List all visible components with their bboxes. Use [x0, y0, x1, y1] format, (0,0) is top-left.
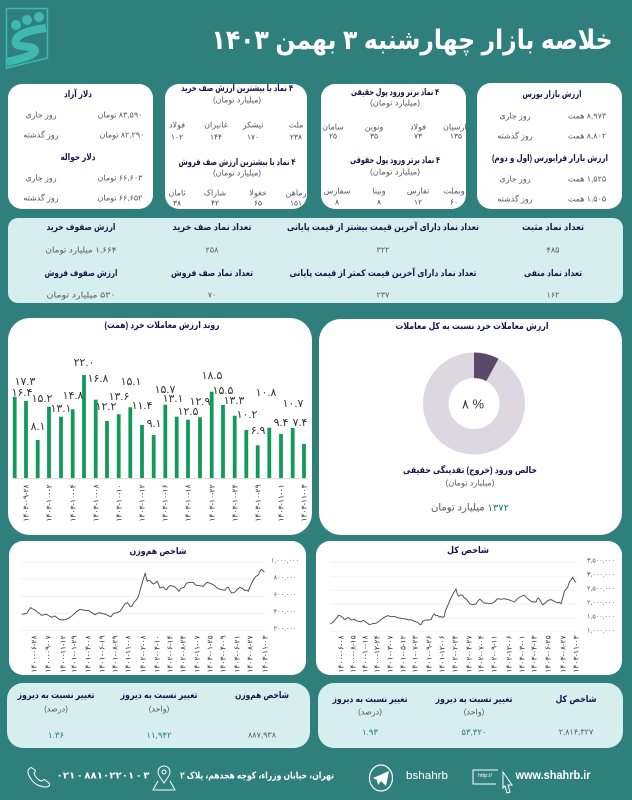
line chart: ۸۰۰,۰۰۰	[274, 574, 296, 582]
line chart: ۱,۰۰۰,۰۰۰	[587, 628, 615, 634]
bar chart: ۲۲.۰	[74, 357, 94, 369]
icon: web link: http://	[478, 773, 492, 779]
bar chart: ۱۴۰۳-۱۱-۰۱	[276, 484, 286, 522]
line chart: ۳,۵۰۰,۰۰۰	[587, 558, 615, 564]
bar chart: ۱۰.۸	[256, 387, 276, 399]
line chart: ۱۴۰۳-۰۱-۲۵	[206, 635, 214, 673]
bar chart: ۱۴۰۳-۱۰-۲۹	[254, 484, 262, 522]
line chart: ۱,۰۰۰,۰۰۰	[271, 558, 299, 564]
panel: market breadth band: ارزش صفوف فروش	[44, 268, 118, 279]
line chart: ۱,۵۰۰,۰۰۰	[587, 614, 615, 620]
panel: market breadth band: ۵۳۰ میلیارد تومان	[47, 290, 116, 300]
panel: market breadth band	[8, 218, 623, 303]
panel: market value: ۱,۵۰۵ همت	[568, 194, 606, 204]
panel: top money inflow: ۱۲	[414, 198, 422, 206]
bar chart: ۱۵.۷	[155, 384, 175, 396]
donut chart: ۸ %	[462, 396, 485, 412]
line chart: ۱۴۰۱-۰۸-۲۹	[110, 635, 120, 673]
chart heading: ارزش معاملات خرد نسبت به کل معاملات	[396, 321, 548, 332]
bar chart: ۱۶.۸	[88, 373, 108, 385]
panel: top money inflow: وبینا	[372, 186, 386, 196]
line chart: ۱۴۰۲-۰۲-۰۸	[138, 635, 148, 673]
panel: dollar rates: ۸۳,۵۹۰ تومان	[98, 110, 142, 120]
panel: market breadth band: تعداد نماد صف خرید	[172, 222, 252, 233]
panel: top money inflow: ۷۳	[414, 132, 422, 140]
bar chart: ۱۴۰۳-۱۰-۱۶	[160, 484, 170, 522]
panel: market breadth band: تعداد نماد صف فروش	[171, 268, 253, 279]
panel: top buy and sell queues: ۶۵	[254, 198, 262, 208]
bar chart: ۱۴۰۳-۱۰-۱۸	[184, 484, 192, 522]
line chart: ۱۴۰۰-۱۲-۲۴	[372, 635, 382, 673]
panel: equal weight index stats: (درصد)	[44, 704, 68, 714]
panel: top money inflow: ۶۰	[450, 198, 458, 206]
line chart: ۱۴۰۰-۰۹-۰۷	[44, 635, 52, 673]
panel: market breadth band: ۱۶۲	[547, 290, 559, 300]
address: تهران، خیابان وزراء، کوچه هجدهم، پلاک ۲	[180, 770, 334, 782]
bar chart: ۱۵.۲	[32, 393, 52, 405]
panel: top buy and sell queues: ۳۸	[173, 198, 181, 208]
panel: top buy and sell queues: ملت	[289, 120, 303, 130]
net real inflow	[403, 464, 537, 514]
panel: top money inflow: تفارس	[407, 186, 429, 196]
panel: top buy and sell queues	[165, 83, 307, 209]
bar chart: ۱۴۰۳-۱۰-۱۲	[138, 484, 146, 522]
bar chart: ۱۴۰۳-۱۰-۲۴	[230, 484, 240, 522]
line chart: ۱۴۰۲-۰۴-۱۰	[152, 635, 162, 673]
panel: top money inflow: فولاد	[410, 122, 426, 132]
line chart: ۱۴۰۳-۰۴-۰۹	[218, 635, 228, 673]
panel: market value: ۸,۸۰۲ همت	[568, 132, 606, 140]
line chart: ۱۴۰۳-۰۶-۲۱	[232, 635, 242, 673]
line chart: ۱۴۰۲-۰۸-۲۴	[178, 635, 188, 673]
panel: equal weight index stats: تغییر نسبت به دیروز	[17, 690, 95, 701]
panel: top buy and sell queues: تیشکر	[242, 120, 263, 130]
panel: top money inflow: ۸	[377, 198, 381, 206]
panel: market value: ۸,۹۷۳ همت	[568, 112, 607, 120]
bar chart: ۱۰.۷	[283, 398, 303, 410]
bar chart: ۱۳.۶	[109, 391, 129, 403]
bar chart: ۱۴۰۳-۱۰-۰۲	[44, 484, 54, 522]
panel: top buy and sell queues: (میلیارد تومان)	[213, 168, 261, 178]
bar chart: ۱۴.۸	[63, 390, 83, 402]
panel: equal weight index stats: ۱.۳۶	[48, 730, 64, 740]
panel: equal weight index stats: ۸۸۷,۹۳۸	[248, 730, 277, 740]
heading: sell queue: ۴ نماد با بیشترین ارزش صف فروش	[178, 157, 296, 168]
panel: market value: روز جاری	[499, 112, 531, 120]
line chart: ۱۴۰۱-۰۱-۲۹	[70, 635, 78, 673]
bar chart: ۱۴۰۳-۱۱-۰۳	[300, 484, 308, 522]
panel: total index stats	[318, 683, 623, 748]
panel: dollar rates	[8, 84, 153, 209]
panel: market breadth band: ۴۸۵	[547, 246, 559, 254]
line chart	[21, 558, 299, 673]
panel: equal weight index chart	[9, 541, 306, 675]
bar chart: ۶.۹	[251, 425, 266, 437]
line chart: ۲۰۰,۰۰۰	[274, 626, 296, 632]
panel: top buy and sell queues: غانیزان	[204, 120, 228, 130]
panel: equal weight index stats	[7, 683, 310, 748]
line chart: ۲,۰۰۰,۰۰۰	[587, 600, 615, 606]
line chart: ۱۴۰۱-۰۴-۰۸	[84, 635, 92, 673]
bar chart: ۱۳.۱	[51, 403, 71, 415]
website: www.shahrb.ir	[515, 770, 591, 782]
line chart: ۱۴۰۱-۰۷-۲۳	[410, 635, 420, 673]
panel: market breadth band: ۲۳۷	[377, 290, 390, 300]
panel: total index stats: ۱.۹۳	[362, 727, 378, 737]
net real inflow: ۱۳۷۲ میلیارد تومان	[431, 502, 509, 514]
panel: total index chart	[316, 541, 622, 675]
bar chart: ۹.۴	[274, 417, 289, 429]
panel: market breadth band: ۲۵۸	[206, 246, 219, 254]
line chart: ۱۴۰۲-۱۲-۰۶	[504, 635, 514, 673]
bar chart: ۱۸.۵	[202, 370, 222, 382]
chart heading: شاخص کل	[447, 545, 489, 556]
bar chart: ۱۴۰۳-۱۰-۲۲	[208, 484, 216, 522]
line chart: ۱۴۰۲-۰۷-۰۴	[476, 635, 486, 673]
icon: map pin	[153, 766, 175, 790]
panel: top buy and sell queues: ۱۵۱	[290, 198, 302, 208]
panel: market breadth band: ۷۰	[208, 290, 216, 300]
panel: market breadth band: تعداد نماد منفی	[524, 268, 582, 278]
line chart: ۱۴۰۱-۰۹-۲۶	[424, 635, 434, 673]
panel: top money inflow: ۸	[335, 198, 339, 206]
panel: top money inflow: ۲۵	[329, 132, 337, 140]
line chart: ۱۴۰۳-۱۱-۰۳	[572, 635, 580, 673]
panel: market breadth band: تعداد نماد دارای آخرین قیمت کمتر از قیمت پایانی	[290, 267, 476, 279]
bar chart: ۱۲.۵	[178, 406, 198, 418]
panel: top buy and sell queues: ثامان	[168, 188, 186, 198]
bar chart: ۱۵.۵	[213, 385, 233, 397]
panel: total index stats: تغییر نسبت به دیروز	[435, 694, 512, 705]
bar chart: ۷.۴	[293, 417, 308, 429]
panel: dollar rates: روز جاری	[25, 110, 57, 120]
panel: top buy and sell queues: رماهن	[286, 188, 307, 198]
panel: top money inflow: ۳۵	[370, 132, 378, 140]
heading: bourse value: ارزش بازار بورس	[522, 89, 582, 100]
panel: top buy and sell queues: ۱۰۲	[171, 132, 183, 142]
bar chart: ۱۲.۹	[190, 396, 210, 408]
panel: market breadth band: ۳۲۲	[377, 246, 389, 254]
line chart: ۱۴۰۳-۱۱-۰۳	[260, 635, 270, 673]
panel: market breadth band: ۱,۶۶۴ میلیارد تومان	[46, 246, 116, 254]
line chart: ۱۴۰۱-۰۳-۰۷	[386, 635, 394, 673]
heading: free dollar: دلار آزاد	[64, 88, 92, 100]
line chart: ۱۴۰۱-۰۵-۱۲	[398, 635, 408, 673]
line chart: ۱۴۰۳-۰۶-۲۵	[544, 635, 552, 673]
icon: telegram	[370, 765, 392, 791]
line chart: ۱۴۰۳-۰۸-۲۷	[246, 635, 254, 673]
panel: top money inflow: (میلیارد تومان)	[370, 168, 420, 176]
line chart: ۱۴۰۰-۰۶-۰۸	[336, 635, 346, 673]
panel: dollar rates: روز جاری	[25, 174, 57, 182]
panel: equal weight index stats: ۱۱,۹۴۲	[146, 730, 172, 740]
line chart: ۱۴۰۳-۰۳-۰۱	[518, 635, 526, 673]
line chart: ۱۴۰۱-۰۶-۱۹	[98, 635, 106, 673]
bar chart: ۸.۱	[31, 421, 45, 433]
heading: havaleh dollar: دلار حواله	[60, 152, 96, 163]
panel: market value: روز گذشته	[497, 130, 533, 140]
panel: top buy and sell queues: ۱۴۴	[210, 132, 222, 142]
panel: retail trade trend	[8, 318, 312, 535]
panel: top buy and sell queues: خغولا	[249, 188, 267, 198]
panel: dollar rates: ۸۲,۲۹۰ تومان	[100, 130, 144, 140]
line chart: ۱۴۰۳-۰۴-۱۳	[530, 635, 538, 673]
panel: top buy and sell queues: فولاد	[169, 120, 185, 130]
net real inflow: خالص ورود (خروج) نقدینگی حقیقی	[403, 464, 537, 476]
bar chart: ۱۲.۲	[96, 401, 116, 413]
telegram handle: bshahrb	[406, 770, 448, 782]
line chart: ۱۴۰۰-۱۰-۱۸	[360, 635, 370, 673]
heading: buy queue: ۴ نماد با بیشترین ارزش صف خرید	[181, 83, 293, 94]
panel: total index stats: شاخص کل	[556, 694, 597, 705]
panel: total index stats: (واحد)	[464, 708, 485, 716]
chart heading: شاخص هم‌وزن	[130, 546, 187, 557]
line chart: ۱۴۰۲-۰۴-۲۷	[464, 635, 474, 673]
panel: market breadth band: ارزش صفوف خرید	[46, 222, 116, 233]
line chart	[330, 558, 615, 673]
line chart: ۱۴۰۱-۱۱-۰۸	[124, 635, 132, 673]
chart heading: روند ارزش معاملات خرد (همت)	[104, 320, 220, 331]
panel: top buy and sell queues: (میلیارد تومان)	[213, 96, 261, 104]
bar chart: ۱۳.۱	[163, 393, 183, 405]
bar chart: ۱۰.۲	[237, 409, 257, 421]
bar chart: ۱۱.۴	[132, 400, 152, 412]
line chart: ۱۴۰۲-۰۹-۱۱	[490, 635, 498, 673]
panel: equal weight index stats: (واحد)	[149, 704, 170, 714]
panel: dollar rates: روز گذشته	[23, 130, 59, 140]
panel: market value: روز گذشته	[497, 194, 533, 204]
panel: equal weight index stats: تغییر نسبت به دیروز	[120, 690, 198, 701]
panel: top buy and sell queues: ۴۲	[211, 198, 219, 208]
icon: web link	[473, 770, 512, 793]
panel: total index stats: تغییر نسبت به دیروز	[332, 694, 408, 705]
panel: retail share donut	[319, 319, 622, 535]
net real inflow: (میلیارد تومان)	[446, 478, 495, 488]
bar chart: ۱۴۰۳-۱۰-۰۴	[68, 484, 78, 522]
line chart: ۱۴۰۰-۰۸-۱۵	[348, 635, 358, 673]
line chart: ۴۰۰,۰۰۰	[274, 608, 296, 616]
panel: top money inflow: (میلیارد تومان)	[370, 98, 420, 108]
panel: total index stats: (درصد)	[358, 708, 382, 716]
bar chart: ۱۴۰۳-۰۹-۲۸	[22, 484, 30, 522]
line chart: ۳,۰۰۰,۰۰۰	[587, 572, 615, 578]
bar chart: ۱۳.۳	[224, 395, 244, 407]
panel: market value: ۱,۵۲۵ همت	[568, 174, 606, 184]
panel: dollar rates: ۶۶,۶۰۳ تومان	[98, 174, 143, 182]
panel: dollar rates: ۶۶,۶۵۲ تومان	[98, 194, 142, 202]
bar chart: ۱۴۰۳-۱۰-۱۰	[114, 484, 124, 522]
icon: phone	[28, 768, 50, 787]
line chart: ۱۴۰۰-۱۱-۱۲	[58, 635, 68, 673]
panel: dollar rates: روز گذشته	[23, 192, 59, 202]
bar chart: ۱۵.۱	[121, 376, 141, 388]
line chart: ۲,۵۰۰,۰۰۰	[587, 586, 615, 592]
phone number: ۰۲۱ - ۸۸۱۰۲۲۰۱ - ۳	[56, 770, 150, 782]
panel: top buy and sell queues: ۱۷۰	[247, 132, 259, 142]
line chart: ۱۴۰۰-۰۶-۲۸	[30, 635, 38, 673]
bar chart: ۱۶.۴	[12, 387, 32, 399]
panel: equal weight index stats: شاخص هم‌وزن	[235, 690, 289, 701]
panel: top money inflow	[321, 84, 469, 209]
line chart: ۶۰۰,۰۰۰	[274, 592, 296, 598]
panel: top buy and sell queues: ۲۳۸	[290, 132, 302, 142]
bar chart: ۹.۱	[147, 418, 161, 430]
panel: top money inflow: سفارس	[324, 186, 351, 196]
panel: market value: روز جاری	[499, 174, 531, 184]
heading: real inflow: ۴ نماد برتر ورود پول حقیقی	[351, 87, 439, 98]
line chart: ۱۴۰۳-۰۸-۲۷	[558, 635, 568, 673]
bar chart	[12, 357, 308, 522]
heading: legal inflow: ۴ نماد برتر ورود پول حقوقی	[350, 155, 440, 166]
panel: top buy and sell queues: شاراک	[204, 188, 226, 198]
line chart: ۱۴۰۲-۰۲-۲۴	[450, 635, 460, 673]
panel: total index stats: ۵۳,۳۲۰	[461, 727, 487, 737]
line chart: ۱۴۰۲-۱۱-۰۷	[192, 635, 202, 673]
line chart: ۱۴۰۲-۰۶-۱۴	[166, 635, 174, 673]
donut chart	[436, 365, 512, 442]
panel: top money inflow: پارسیان	[443, 122, 469, 132]
panel: market value	[477, 83, 622, 209]
panel: market breadth band: تعداد نماد مثبت	[522, 222, 584, 232]
panel: top money inflow: ونوین	[365, 122, 383, 132]
panel: top money inflow: وبملت	[443, 186, 465, 196]
panel: total index stats: ۲,۸۱۴,۳۲۷	[559, 728, 594, 736]
line chart: ۱۴۰۱-۱۲-۰۶	[438, 635, 446, 673]
panel: top money inflow: ۱۳۵	[450, 132, 462, 140]
panel: top money inflow: سامان	[322, 122, 344, 132]
bar chart: ۱۴۰۳-۱۰-۰۸	[92, 484, 100, 522]
panel: market breadth band: تعداد نماد دارای آخرین قیمت بیشتر از قیمت پایانی	[287, 221, 479, 233]
logo	[6, 8, 48, 68]
bar chart: ۱۷.۳	[15, 376, 35, 388]
